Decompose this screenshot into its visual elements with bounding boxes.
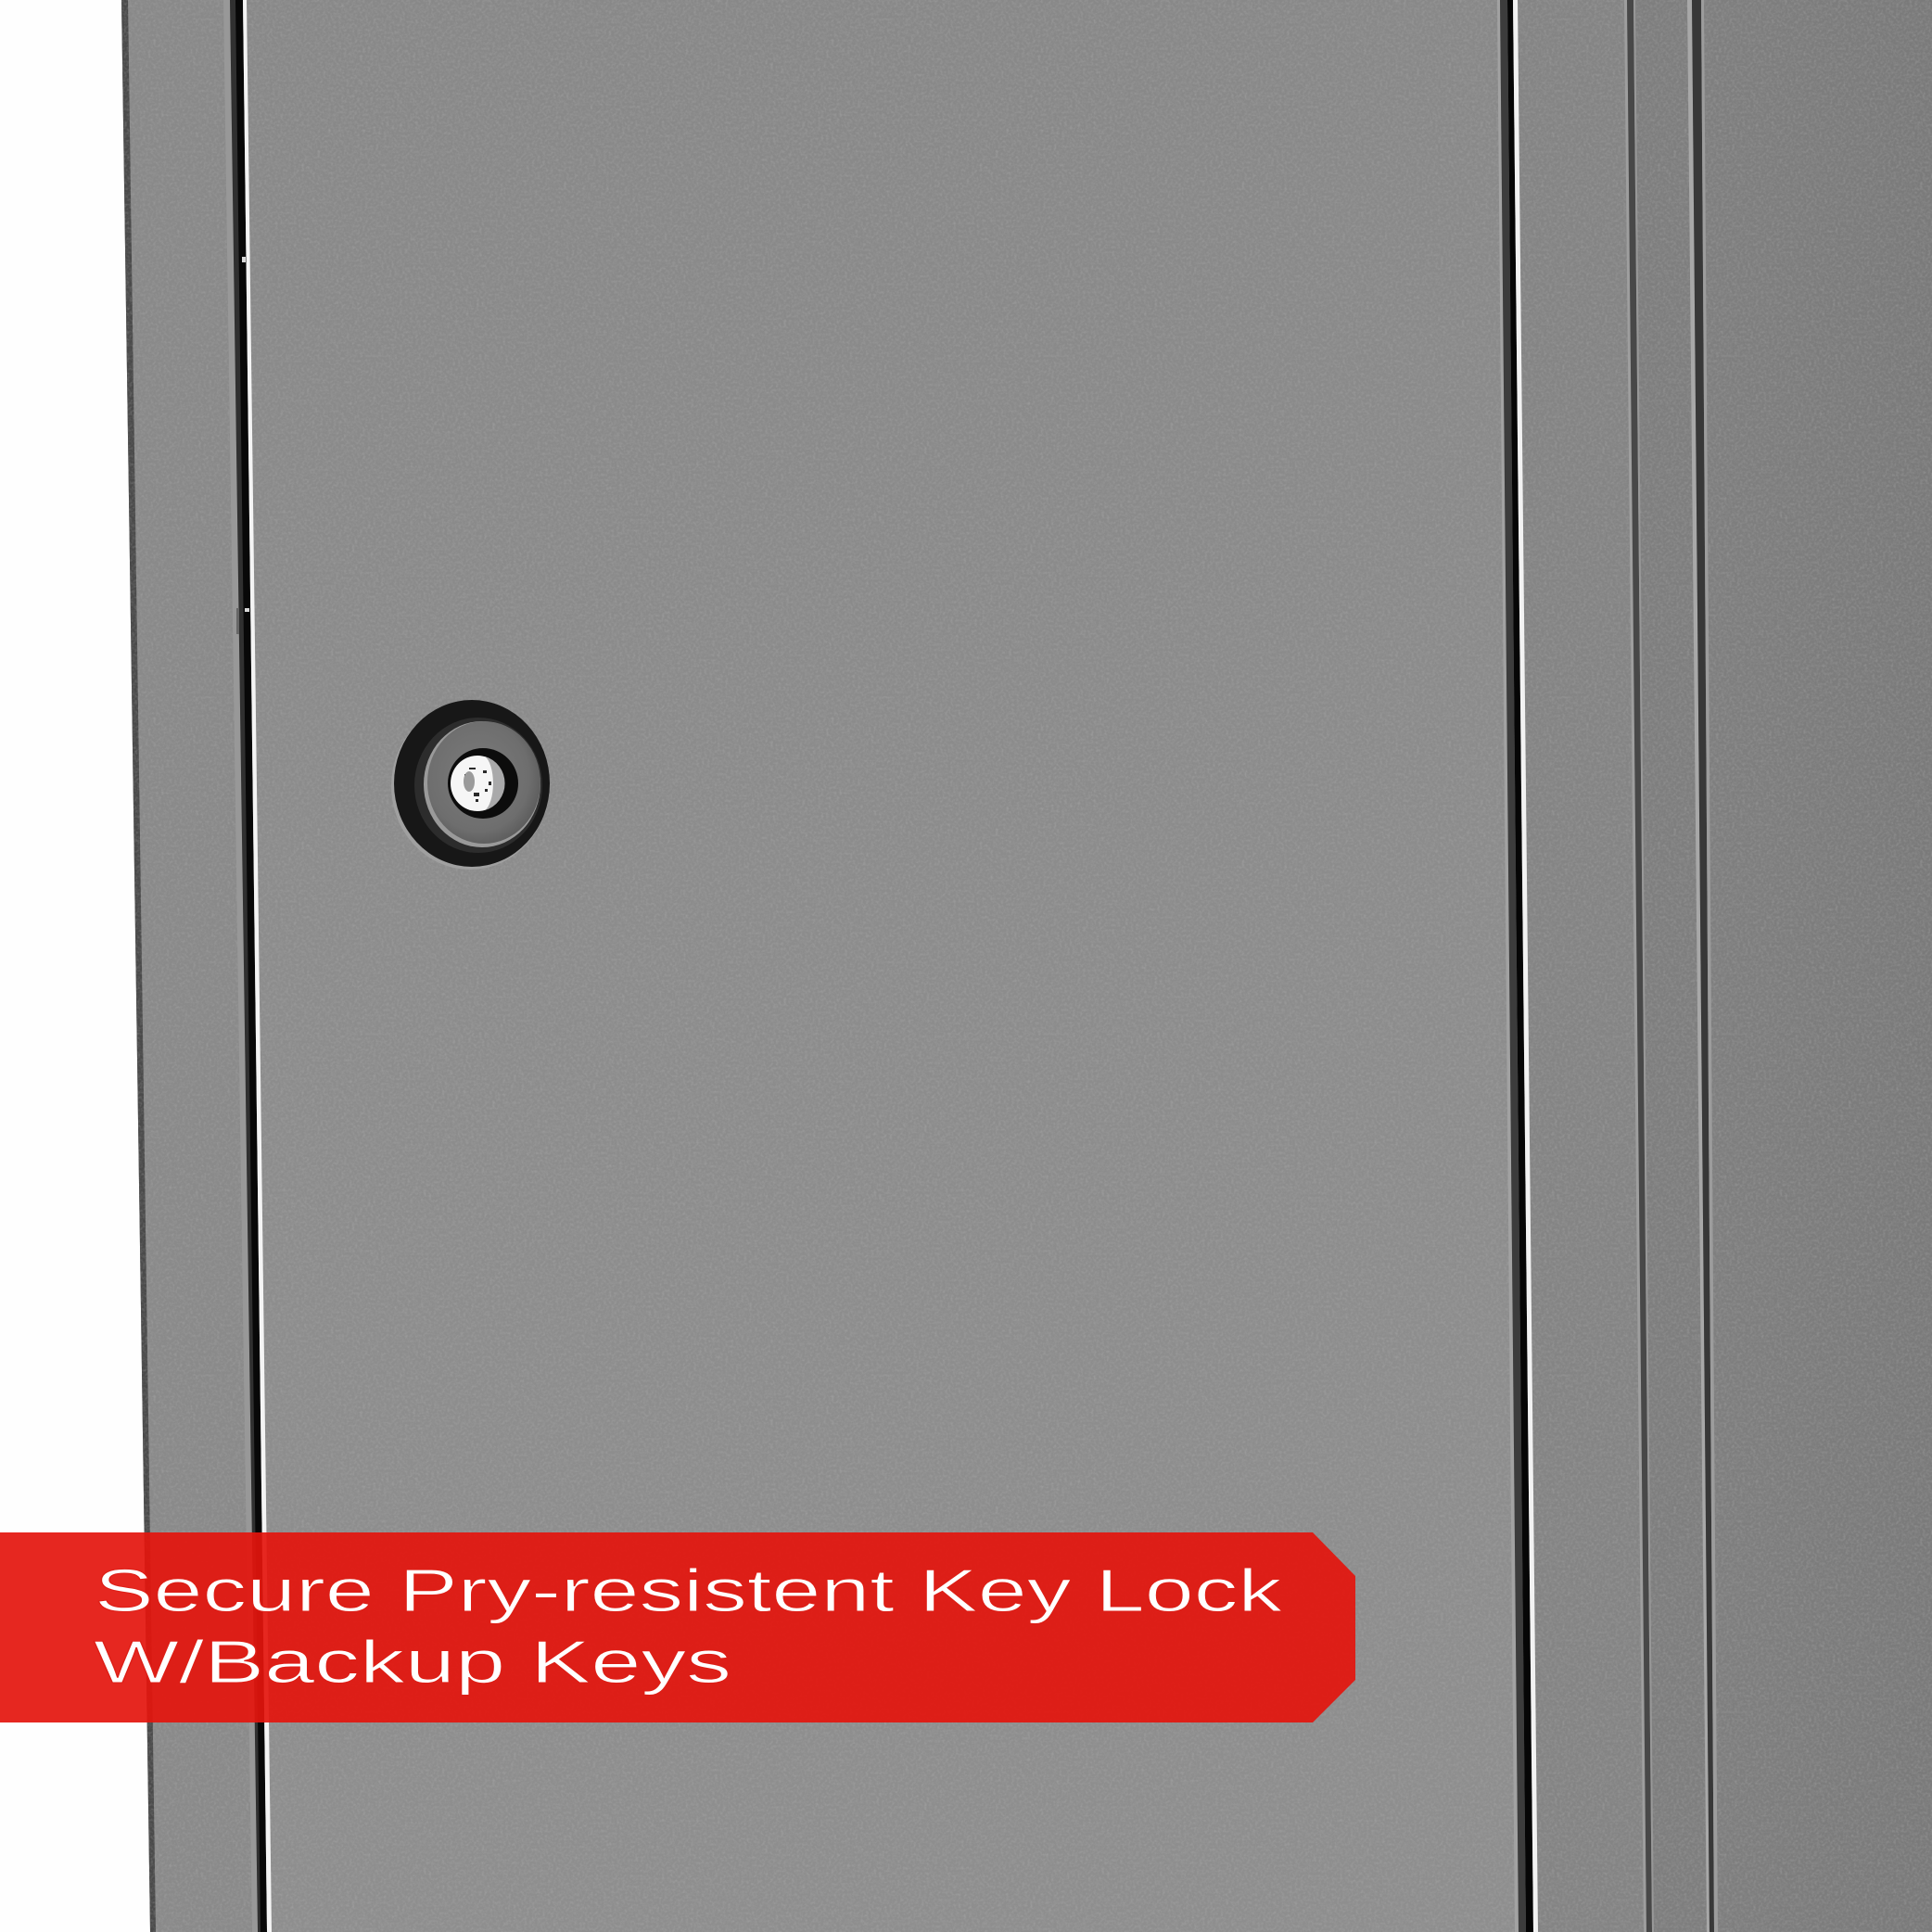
lock keyway shading <box>464 771 475 792</box>
banner heading line 1: Secure Pry-resistent Key Lock <box>95 1557 1283 1624</box>
lock outer black ring <box>394 700 550 867</box>
lock cylinder crescent <box>485 756 505 810</box>
left door gap <box>223 0 272 1932</box>
lock ring inner band <box>414 718 542 853</box>
frame outer dark edge <box>121 0 156 1932</box>
door panel <box>243 0 1534 1932</box>
right door gap <box>1497 0 1538 1932</box>
side panel rear <box>1695 0 1932 1932</box>
lock light rim <box>391 703 549 870</box>
lock keyway recess <box>448 748 518 819</box>
side panel fold line 2 <box>1687 0 1718 1932</box>
lock collar light rim <box>424 721 540 847</box>
side panel fold line 1 <box>1624 0 1654 1932</box>
banner <box>0 1532 1355 1722</box>
door frame left strip <box>121 0 267 1932</box>
banner shape <box>0 1532 1355 1722</box>
frame notch marks <box>242 257 246 262</box>
lock silver cylinder <box>451 756 504 811</box>
banner heading line 2: W/Backup Keys <box>94 1628 731 1696</box>
side panel middle <box>1630 0 1712 1932</box>
lock key pins <box>464 768 491 802</box>
icon: key lock <box>391 700 550 870</box>
side panel front <box>1513 0 1650 1932</box>
lock gray collar <box>427 721 540 844</box>
